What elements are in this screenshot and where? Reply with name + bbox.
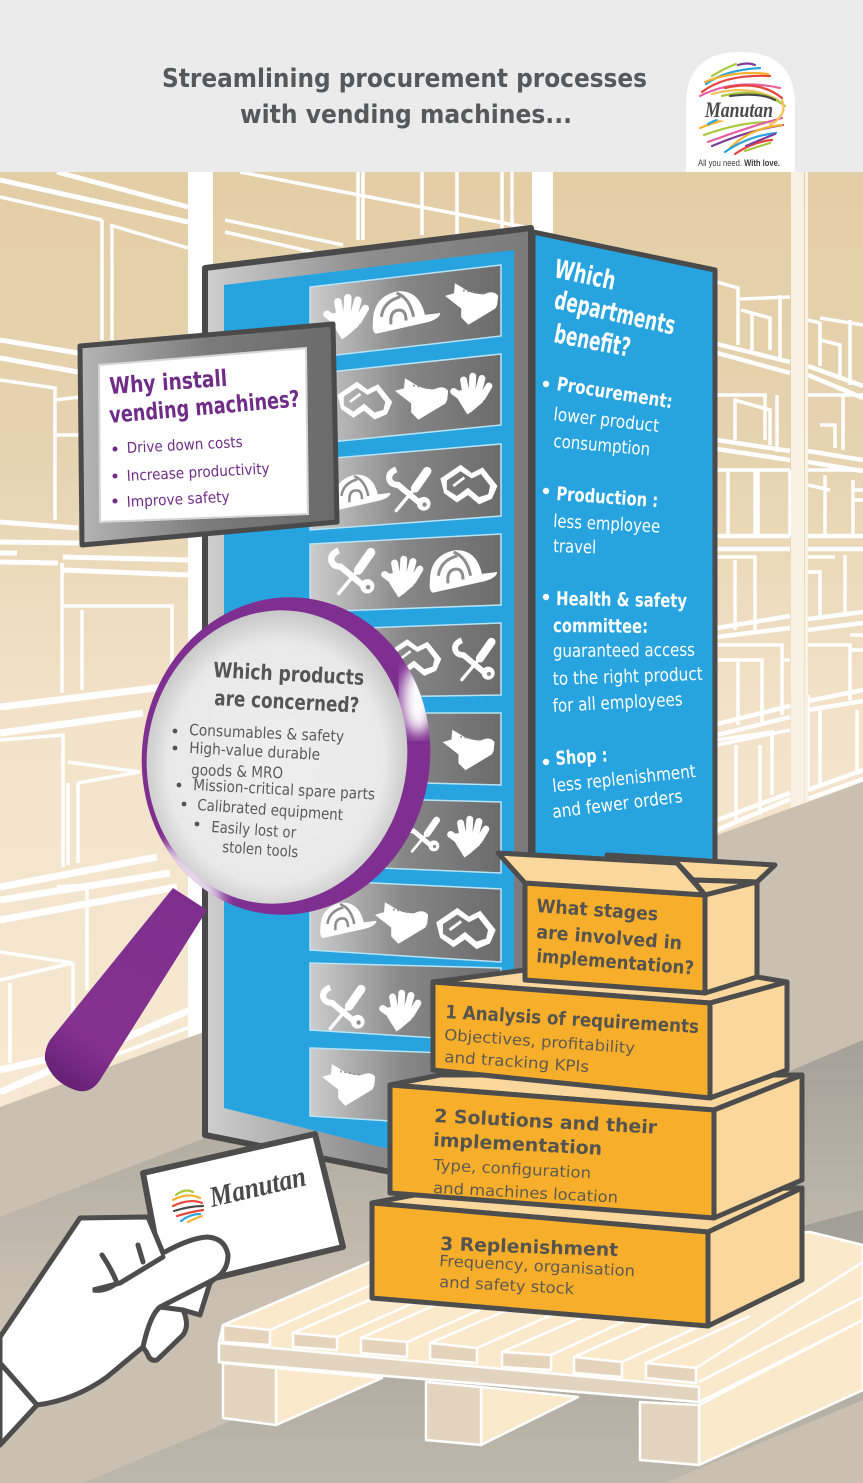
machine front [205,228,531,1200]
products list [173,721,375,861]
title: with vending machines... [240,100,572,130]
pallet beam [219,1343,699,1402]
lens rim [142,597,430,915]
product icons [320,283,498,1106]
business card: Manutan [206,1161,309,1214]
departments text: travel [553,536,597,558]
departments text: and fewer orders [551,786,684,823]
panel: why install vending machines: Drive down costs [126,433,243,457]
finger lines [93,1245,213,1347]
lens [128,593,426,921]
panel: why install vending machines: vending machines? [108,386,301,429]
pallet [219,1232,863,1465]
pallet blocks [223,1363,699,1465]
wrist [0,1363,37,1445]
business card [143,1134,343,1290]
box 1: analysis: and tracking KPIs [444,1048,590,1076]
panel: why install vending machines: Improve safety [126,488,230,511]
products list: Calibrated equipment [197,796,344,824]
departments text: Production : [556,483,659,512]
logo: Manutan: Manutan [704,97,773,122]
departments text: to the right product [552,664,703,690]
departments text: less employee [553,511,661,538]
open top box: what stages: implementation? [536,946,695,979]
logo: Manutan: All you need. With love. [698,158,780,168]
vending machine [205,228,715,1200]
panel: why install vending machines: Increase productivity [126,460,270,485]
products list: stolen tools [222,838,299,861]
products heading [213,658,365,718]
departments text: lower product [552,404,660,437]
box 2: solutions: 2 Solutions and their [434,1106,658,1139]
open top box: what stages: are involved in [536,922,683,954]
departments text: Shop : [555,744,608,770]
pallet side faces [276,1320,863,1465]
box 3: replenishment: Frequency, organisation [439,1252,635,1280]
machine blue panel [224,250,514,1180]
panel: why install vending machines [80,324,337,545]
slat ends [223,1325,696,1383]
magnifying glass [45,590,440,1091]
box 1: analysis: Objectives, profitability [444,1026,636,1057]
deck slat lines [270,1262,863,1382]
hand holding business card [0,1134,343,1445]
departments text: committee: [553,615,648,638]
box 2: solutions: and machines location [433,1179,618,1207]
box 2: solutions [390,1075,802,1218]
box 3: replenishment [372,1188,802,1326]
box 3: replenishment: and safety stock [439,1273,575,1298]
open top box: what stages [498,853,775,993]
products list: Consumables & safety [189,721,344,746]
products heading: Which products [213,658,365,690]
departments text: guaranteed access [553,640,695,662]
departments text: Health & safety [556,588,688,612]
departments text: Which [552,255,618,297]
logo: Manutan [686,52,795,172]
departments text: for all employees [552,689,683,717]
pallet deck [219,1232,863,1402]
departments text: departments [551,286,678,341]
box 2: solutions: Type, configuration [432,1156,592,1182]
departments text: less replenishment [551,761,697,797]
products list: Mission-critical spare parts [193,776,375,804]
panel: why install vending machines: Why install [109,366,228,400]
stacked boxes [372,853,802,1326]
departments text: consumption [553,431,651,460]
product slots [310,265,501,1128]
open top box: what stages: What stages [536,896,659,925]
box 2: solutions: implementation [433,1130,603,1160]
products list: goods & MRO [191,761,283,782]
products list: Easily lost or [211,818,297,842]
machine side panel [533,232,715,870]
departments text [543,255,703,823]
box 3: replenishment: 3 Replenishment [440,1234,619,1261]
box 1: analysis [433,970,787,1098]
box 1: analysis: 1 Analysis of requirements [445,1002,700,1038]
warehouse background [0,172,863,1172]
products heading: are concerned? [214,686,360,718]
title [162,64,647,130]
departments text: benefit? [552,319,633,364]
handle [45,888,207,1091]
departments text: Procurement: [555,373,674,413]
title: Streamlining procurement processes [162,64,647,94]
products list: High-value durable [189,739,321,764]
header band [0,0,863,172]
hand [0,1217,228,1405]
floor [0,782,863,1483]
